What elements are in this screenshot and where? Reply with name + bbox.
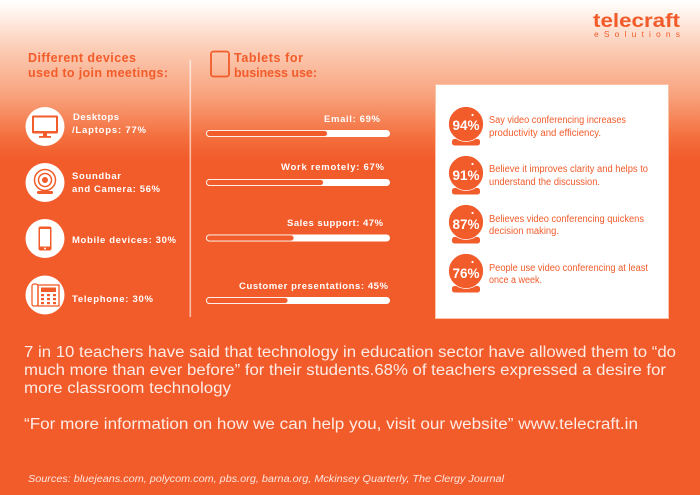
bar: customer presentations 45%: Customer presentations: 45% [239, 281, 389, 292]
device: desktops and laptops: Desktops [73, 112, 119, 123]
stat: 91%: understand the discussion. [489, 177, 600, 188]
text block: teachers statement: 7 in 10 teachers have said that technology in education sector have allowed them to “do [24, 344, 676, 361]
text block: teachers statement: much more than ever before” for their students.68% of teachers expressed a desire for [24, 362, 666, 379]
heading: tablets for business use: Tablets for [234, 51, 303, 65]
panel: video conferencing statistics [436, 84, 668, 318]
stat: 91%: Believe it improves clarity and helps to [489, 164, 648, 175]
bar: email 69%: Email: 69% [324, 114, 381, 125]
heading: different devices [28, 51, 168, 80]
stat: 94%: 94% [452, 118, 480, 133]
stat: 87%: 87% [452, 217, 480, 232]
stat: 91%: 91% [452, 168, 480, 183]
device: mobile devices [26, 219, 177, 258]
device: soundbar and camera [26, 163, 161, 202]
stat: 76%: People use video conferencing at least [489, 263, 648, 274]
device: telephone [26, 276, 154, 314]
stat: 76%: 76% [452, 266, 480, 281]
stat: 91% [448, 156, 648, 194]
bar: sales support 47% [206, 218, 390, 242]
stat: 94% [448, 106, 626, 146]
icon: mobile phone [26, 219, 64, 258]
icon: desktop monitor [26, 107, 64, 146]
text block: teachers statement [24, 344, 676, 397]
device: desktops and laptops [26, 107, 147, 146]
bar: work remotely 67%: Work remotely: 67% [281, 162, 385, 173]
device: mobile devices: Mobile devices: 30% [72, 235, 177, 246]
logo: telecraft eSolutions: telecraft [593, 11, 681, 32]
heading: different devices: used to join meetings: [28, 66, 168, 80]
device: telephone: Telephone: 30% [72, 294, 154, 305]
device: desktops and laptops: /Laptops: 77% [72, 125, 147, 136]
device: soundbar and camera: Soundbar [72, 171, 121, 182]
logo: telecraft eSolutions [593, 11, 681, 39]
stat: 87% [448, 204, 644, 244]
bar: customer presentations 45% [206, 281, 390, 304]
heading: tablets for business use [234, 51, 317, 80]
logo: telecraft eSolutions: eSolutions [594, 29, 680, 39]
stat: 76% [448, 254, 648, 292]
stat: 87%: Believes video conferencing quickens [489, 214, 644, 225]
heading: different devices: Different devices [28, 51, 136, 65]
stat: 94%: Say video conferencing increases [489, 115, 626, 126]
device: soundbar and camera: and Camera: 56% [72, 184, 161, 195]
text block: call to action: “For more information on how we can help you, visit our website” www.telecraft.in [24, 416, 638, 433]
bar: email 69% [206, 114, 390, 137]
stat: 87%: decision making. [489, 226, 559, 237]
icon: webcam [26, 163, 64, 202]
icon: tablet [211, 52, 229, 76]
stat: 76%: once a week. [489, 275, 542, 286]
text block: teachers statement: more classroom technology [24, 380, 231, 397]
bar: work remotely 67% [206, 162, 390, 186]
bar: sales support 47%: Sales support: 47% [287, 218, 384, 229]
text block: sources: Sources: bluejeans.com, polycom.com, pbs.org, barna.org, Mckinsey Quarterly, The Clergy Journal [28, 474, 505, 485]
icon: desk telephone [26, 276, 64, 314]
stat: 94%: productivity and efficiency. [489, 128, 601, 139]
heading: tablets for business use: business use: [234, 66, 317, 80]
